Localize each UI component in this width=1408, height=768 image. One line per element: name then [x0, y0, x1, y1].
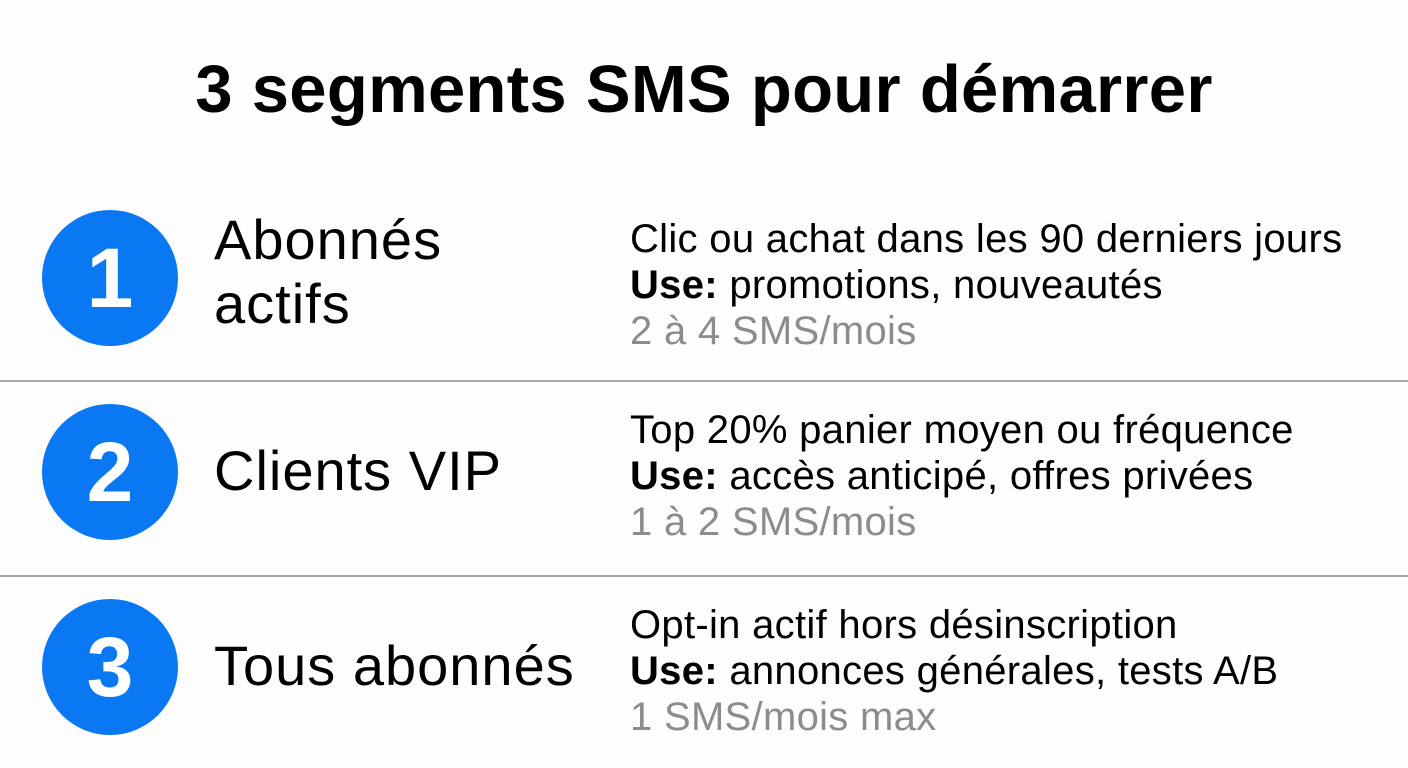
row 2	[42, 404, 1294, 544]
description 1: Use: promotions, nouveautés	[630, 263, 1163, 307]
label: Abonnés actifs: Abonnés	[214, 208, 442, 271]
icon: number 2	[42, 404, 178, 540]
description 1	[630, 217, 1342, 353]
icon: number 3: 3	[87, 620, 133, 714]
description 1: 2 à 4 SMS/mois	[630, 309, 917, 353]
description 3	[630, 603, 1278, 739]
description 3: Use: annonces générales, tests A/B	[630, 649, 1278, 693]
description 2: Top 20% panier moyen ou fréquence	[630, 408, 1294, 452]
label: Abonnés actifs	[214, 208, 442, 335]
icon: number 3	[42, 599, 178, 735]
icon: number 2: 2	[87, 425, 133, 519]
label: Tous abonnés: Tous abonnés	[214, 634, 575, 697]
description 2: 1 à 2 SMS/mois	[630, 500, 917, 544]
title: 3 segments SMS pour démarrer	[195, 52, 1213, 127]
icon: number 1	[42, 210, 178, 346]
description 3: 1 SMS/mois max	[630, 695, 936, 739]
row 3	[42, 599, 1278, 739]
description 1: Clic ou achat dans les 90 derniers jours	[630, 217, 1342, 261]
row 1	[42, 208, 1342, 353]
label: Abonnés actifs: actifs	[214, 272, 351, 335]
icon: number 1: 1	[87, 231, 133, 325]
description 3: Opt-in actif hors désinscription	[630, 603, 1178, 647]
description 2	[630, 408, 1294, 544]
label: Clients VIP: Clients VIP	[214, 439, 502, 502]
description 2: Use: accès anticipé, offres privées	[630, 454, 1253, 498]
